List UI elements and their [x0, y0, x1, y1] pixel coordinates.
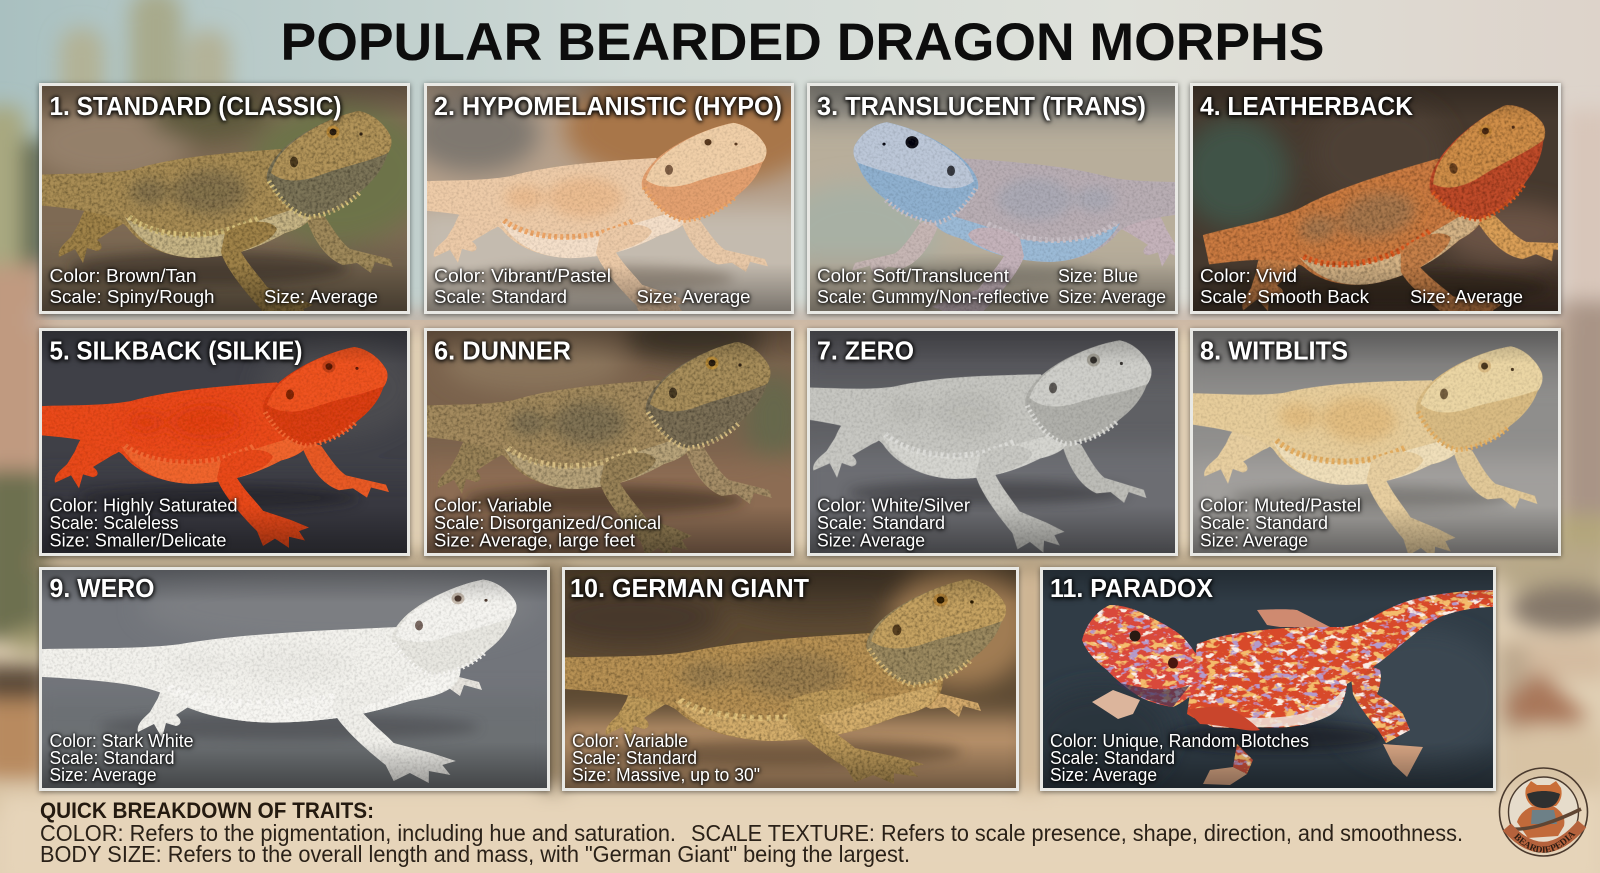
traits: Size: Average: [636, 287, 750, 307]
lizard: paradox red with white and purple blotches: [1082, 590, 1493, 785]
traits: Size: Massive, up to 30": [572, 765, 760, 785]
color definition: COLOR: Refers to the pigmentation, including hue and saturation.: [40, 820, 676, 846]
panel: 9. Wero: [39, 567, 550, 791]
panel: 6. Dunner: [424, 328, 794, 556]
logo: Beardiepedia badge: BEARDIEPEDIA: [1514, 832, 1576, 853]
title: POPULAR BEARDED DRAGON MORPHS: [280, 13, 1324, 72]
traits: Size: Average: [264, 287, 378, 307]
traits: Size: Average: [1050, 765, 1157, 785]
card title: 3. TRANSLUCENT (TRANS): [817, 93, 1146, 121]
traits: Size: Average: [1410, 287, 1523, 307]
traits: Scale: Disorganized/Conical: [434, 513, 661, 533]
card title: 7. ZERO: [817, 338, 914, 366]
traits: Scale: Standard: [434, 287, 567, 307]
traits: Size: Smaller/Delicate: [50, 530, 226, 550]
traits: Color: Muted/Pastel: [1200, 496, 1361, 516]
breakdown heading: QUICK BREAKDOWN OF TRAITS:: [40, 798, 374, 823]
traits: Size: Average, large feet: [434, 530, 635, 550]
traits: [817, 266, 1166, 307]
logo: Beardiepedia badge: [1498, 767, 1588, 857]
traits: Size: Average: [817, 530, 925, 550]
traits: Scale: Standard: [50, 748, 174, 768]
traits: Scale: Spiny/Rough: [50, 287, 214, 307]
traits: Size: Blue: [1058, 266, 1138, 286]
traits: [817, 496, 970, 550]
traits: Color: Variable: [434, 496, 552, 516]
card title: 11. PARADOX: [1050, 575, 1213, 603]
traits: Color: Stark White: [50, 731, 194, 751]
traits: Scale: Standard: [572, 748, 697, 768]
text block: quick breakdown of traits: [40, 798, 1463, 867]
panel: 4. Leatherback: [1190, 83, 1561, 314]
card title: 9. WERO: [50, 575, 154, 603]
panel: 1. Standard (Classic): [39, 83, 410, 314]
traits: Scale: Smooth Back: [1200, 287, 1370, 307]
traits: [1200, 496, 1361, 550]
traits: [50, 496, 238, 550]
card title: 6. DUNNER: [434, 338, 571, 366]
traits: Color: Unique, Random Blotches: [1050, 731, 1309, 751]
traits: Color: Vivid: [1200, 266, 1297, 286]
traits: [572, 731, 760, 785]
card title: 10. GERMAN GIANT: [570, 575, 809, 603]
traits: Color: Soft/Translucent: [817, 266, 1009, 286]
panel: 8. Witblits: [1190, 328, 1561, 556]
body size definition: BODY SIZE: Refers to the overall length and mass, with "German Giant" being the largest.: [40, 841, 910, 867]
traits: [50, 731, 194, 785]
traits: [434, 266, 750, 307]
card title: 1. STANDARD (CLASSIC): [50, 93, 342, 121]
traits: Color: Highly Saturated: [50, 496, 238, 516]
traits: Size: Average: [1058, 287, 1166, 307]
traits: Scale: Standard: [1200, 513, 1328, 533]
traits: [434, 496, 661, 550]
traits: Size: Average: [1200, 530, 1308, 550]
panel: 10. German Giant: [562, 567, 1019, 791]
panel: 3. Translucent (Trans): [807, 83, 1178, 314]
traits: Scale: Gummy/Non-reflective: [817, 287, 1049, 307]
card title: 5. SILKBACK (SILKIE): [50, 338, 302, 366]
card title: 8. WITBLITS: [1200, 338, 1348, 366]
traits: [50, 266, 378, 307]
panel: 2. Hypomelanistic (Hypo): [424, 83, 794, 314]
traits: Size: Average: [50, 765, 156, 785]
traits: Scale: Standard: [1050, 748, 1175, 768]
traits: [1200, 266, 1523, 307]
card title: 2. HYPOMELANISTIC (HYPO): [434, 93, 782, 121]
traits: Scale: Standard: [817, 513, 945, 533]
traits: Color: Vibrant/Pastel: [434, 266, 611, 286]
traits: Scale: Scaleless: [50, 513, 178, 533]
traits: [1050, 731, 1309, 785]
panel: 5. Silkback (Silkie): [39, 328, 410, 556]
panel: 7. Zero: [807, 328, 1178, 556]
traits: Color: Brown/Tan: [50, 266, 196, 286]
card title: 4. LEATHERBACK: [1200, 93, 1414, 121]
traits: Color: White/Silver: [817, 496, 970, 516]
traits: Color: Variable: [572, 731, 688, 751]
panel: 11. Paradox: [1040, 567, 1496, 791]
